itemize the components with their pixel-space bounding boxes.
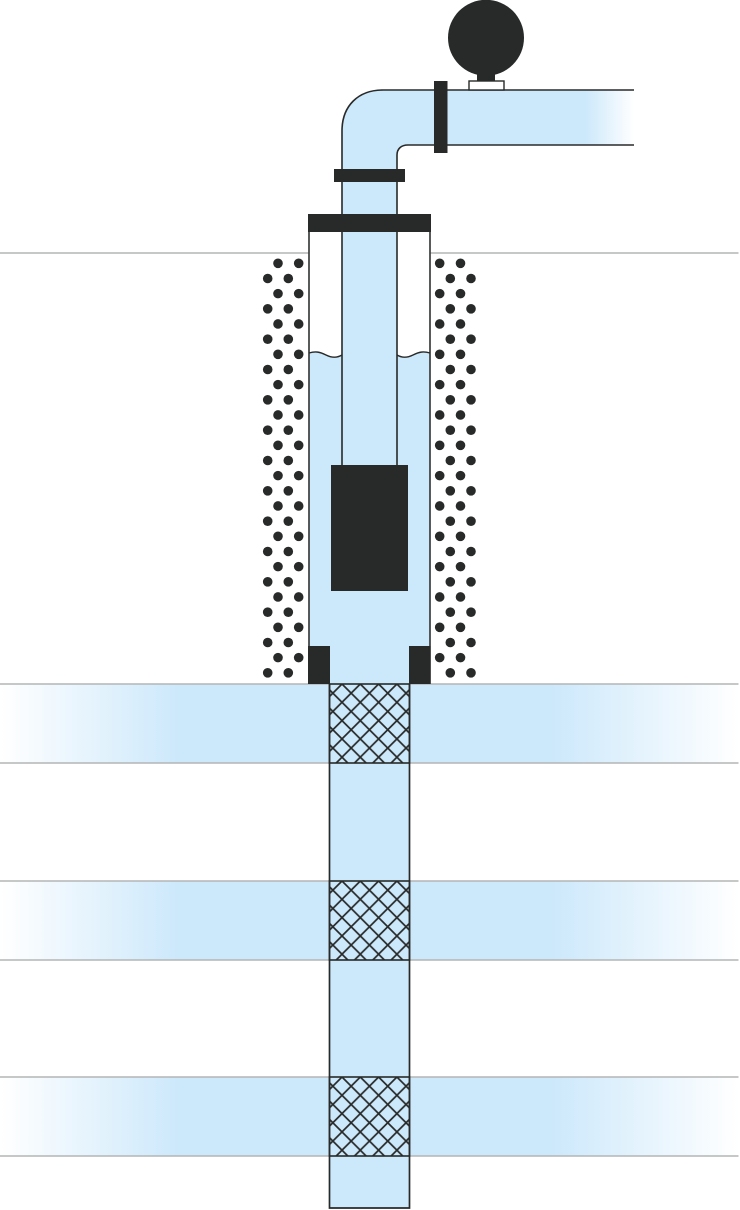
gravel pack: left — [263, 258, 304, 678]
screen 1 — [330, 684, 410, 763]
casing shoe: right — [409, 646, 430, 684]
pressure gauge — [448, 0, 524, 90]
gravel pack: right — [435, 258, 476, 678]
submersible pump — [331, 465, 408, 591]
well casing with water — [309, 232, 430, 684]
water-bearing layer 3 — [0, 1077, 738, 1156]
water-bearing layer 1 — [0, 684, 738, 763]
casing shoe: left — [308, 646, 330, 684]
ground and strata lines — [0, 253, 738, 1156]
wellhead cap — [308, 214, 431, 232]
riser pipe with elbow and outlet — [342, 90, 634, 465]
flange on vertical pipe — [334, 169, 405, 182]
screen 3 — [330, 1077, 410, 1156]
flange on horizontal pipe — [434, 81, 448, 153]
lower well pipe — [330, 684, 410, 1208]
screen 2 — [330, 881, 410, 960]
water-bearing layer 2 — [0, 881, 738, 960]
